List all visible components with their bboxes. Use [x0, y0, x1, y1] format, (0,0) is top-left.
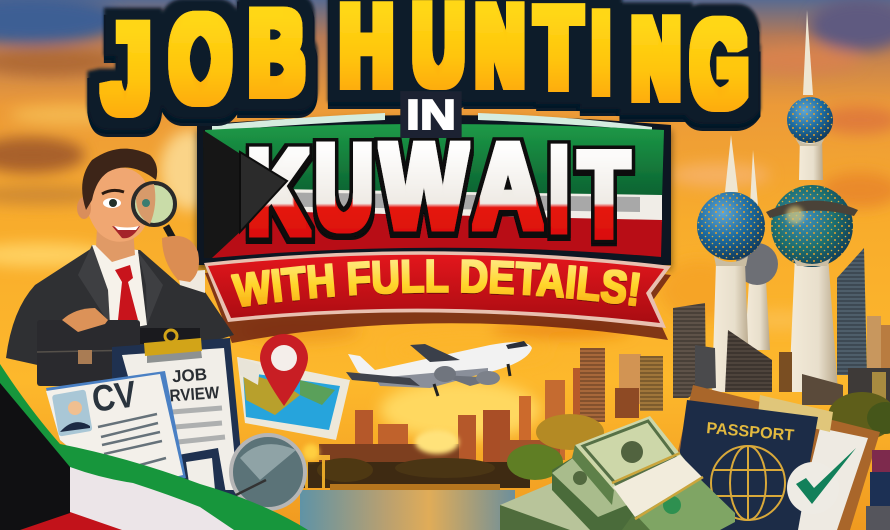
left Kuwait tower: [697, 135, 765, 392]
businessman with magnifier: [6, 149, 234, 370]
title: JOB HUNTING: [103, 0, 748, 139]
passport globe: [711, 446, 785, 520]
flag panel: [197, 113, 671, 265]
flag highlight edge: [212, 113, 652, 131]
flag white: [70, 467, 234, 530]
river and park: [300, 414, 604, 530]
distant city skyline: [319, 348, 663, 464]
lower stack left: [500, 483, 615, 530]
white band: [205, 188, 662, 222]
far Kuwait tower grey: [736, 150, 778, 350]
white band: [613, 455, 702, 517]
word: IN: IN: [406, 91, 456, 138]
eye: [103, 198, 121, 208]
title: JOB HUNTING: G: [691, 0, 748, 132]
approval check mark: [787, 448, 856, 514]
black hoist outer: [203, 130, 242, 258]
right edge flag stripes: [866, 450, 890, 530]
tie: [115, 265, 138, 320]
red band: [205, 210, 662, 258]
hair: [82, 149, 157, 210]
map with location pin: [237, 334, 350, 440]
passport label: PASSPORT: [706, 420, 795, 445]
title: KUWAIT: I: [550, 121, 568, 257]
shirt: [92, 245, 147, 330]
brown document clipboard: [660, 385, 880, 530]
title: KUWAIT: K: [247, 124, 309, 260]
face: [84, 168, 150, 242]
magnifier lens: [133, 183, 175, 225]
CV document: [46, 371, 186, 490]
title: KUWAIT: W: [381, 118, 468, 254]
top bill: [575, 416, 685, 490]
passport: [680, 400, 818, 530]
smile: [112, 226, 140, 238]
foreground Kuwait flag: [0, 364, 308, 530]
cuff: [178, 270, 205, 293]
black hoist inner triangle: [240, 152, 287, 232]
title: KUWAIT: U: [315, 119, 373, 255]
title: JOB HUNTING: J: [103, 0, 151, 139]
green band: [205, 124, 664, 200]
CV photo: [52, 389, 93, 437]
gold clip: [144, 338, 202, 356]
stack base: [560, 495, 735, 530]
magnifier handle: [166, 226, 192, 273]
ribbon: with full details: [204, 251, 671, 343]
location pin: [260, 334, 308, 406]
clipboard heading: JOB: [171, 365, 208, 386]
ribbon headline: WITH FULL DETAILS!: [230, 259, 640, 308]
title: KUWAIT: A: [473, 118, 543, 254]
flag red: [20, 512, 122, 530]
hand on briefcase: [62, 308, 108, 332]
suit: [6, 248, 234, 370]
airplane: [346, 341, 532, 396]
small magnifying glass: [231, 435, 305, 509]
briefcase: [37, 308, 200, 386]
CV label: CV: [89, 373, 139, 420]
title: KUWAIT: [247, 118, 629, 262]
flag black: [0, 383, 70, 530]
neck: [96, 228, 135, 262]
flag green: [0, 364, 308, 530]
tall Kuwait tower: [766, 10, 858, 392]
title: KUWAIT: T: [579, 126, 629, 262]
cash stacks: [500, 416, 735, 530]
right skyline: [673, 248, 890, 440]
clipboard: job interview: [112, 330, 246, 505]
bottom bill right: [636, 477, 735, 530]
clipboard heading: ERVIEW: [159, 383, 221, 406]
holding hand: [162, 236, 199, 282]
